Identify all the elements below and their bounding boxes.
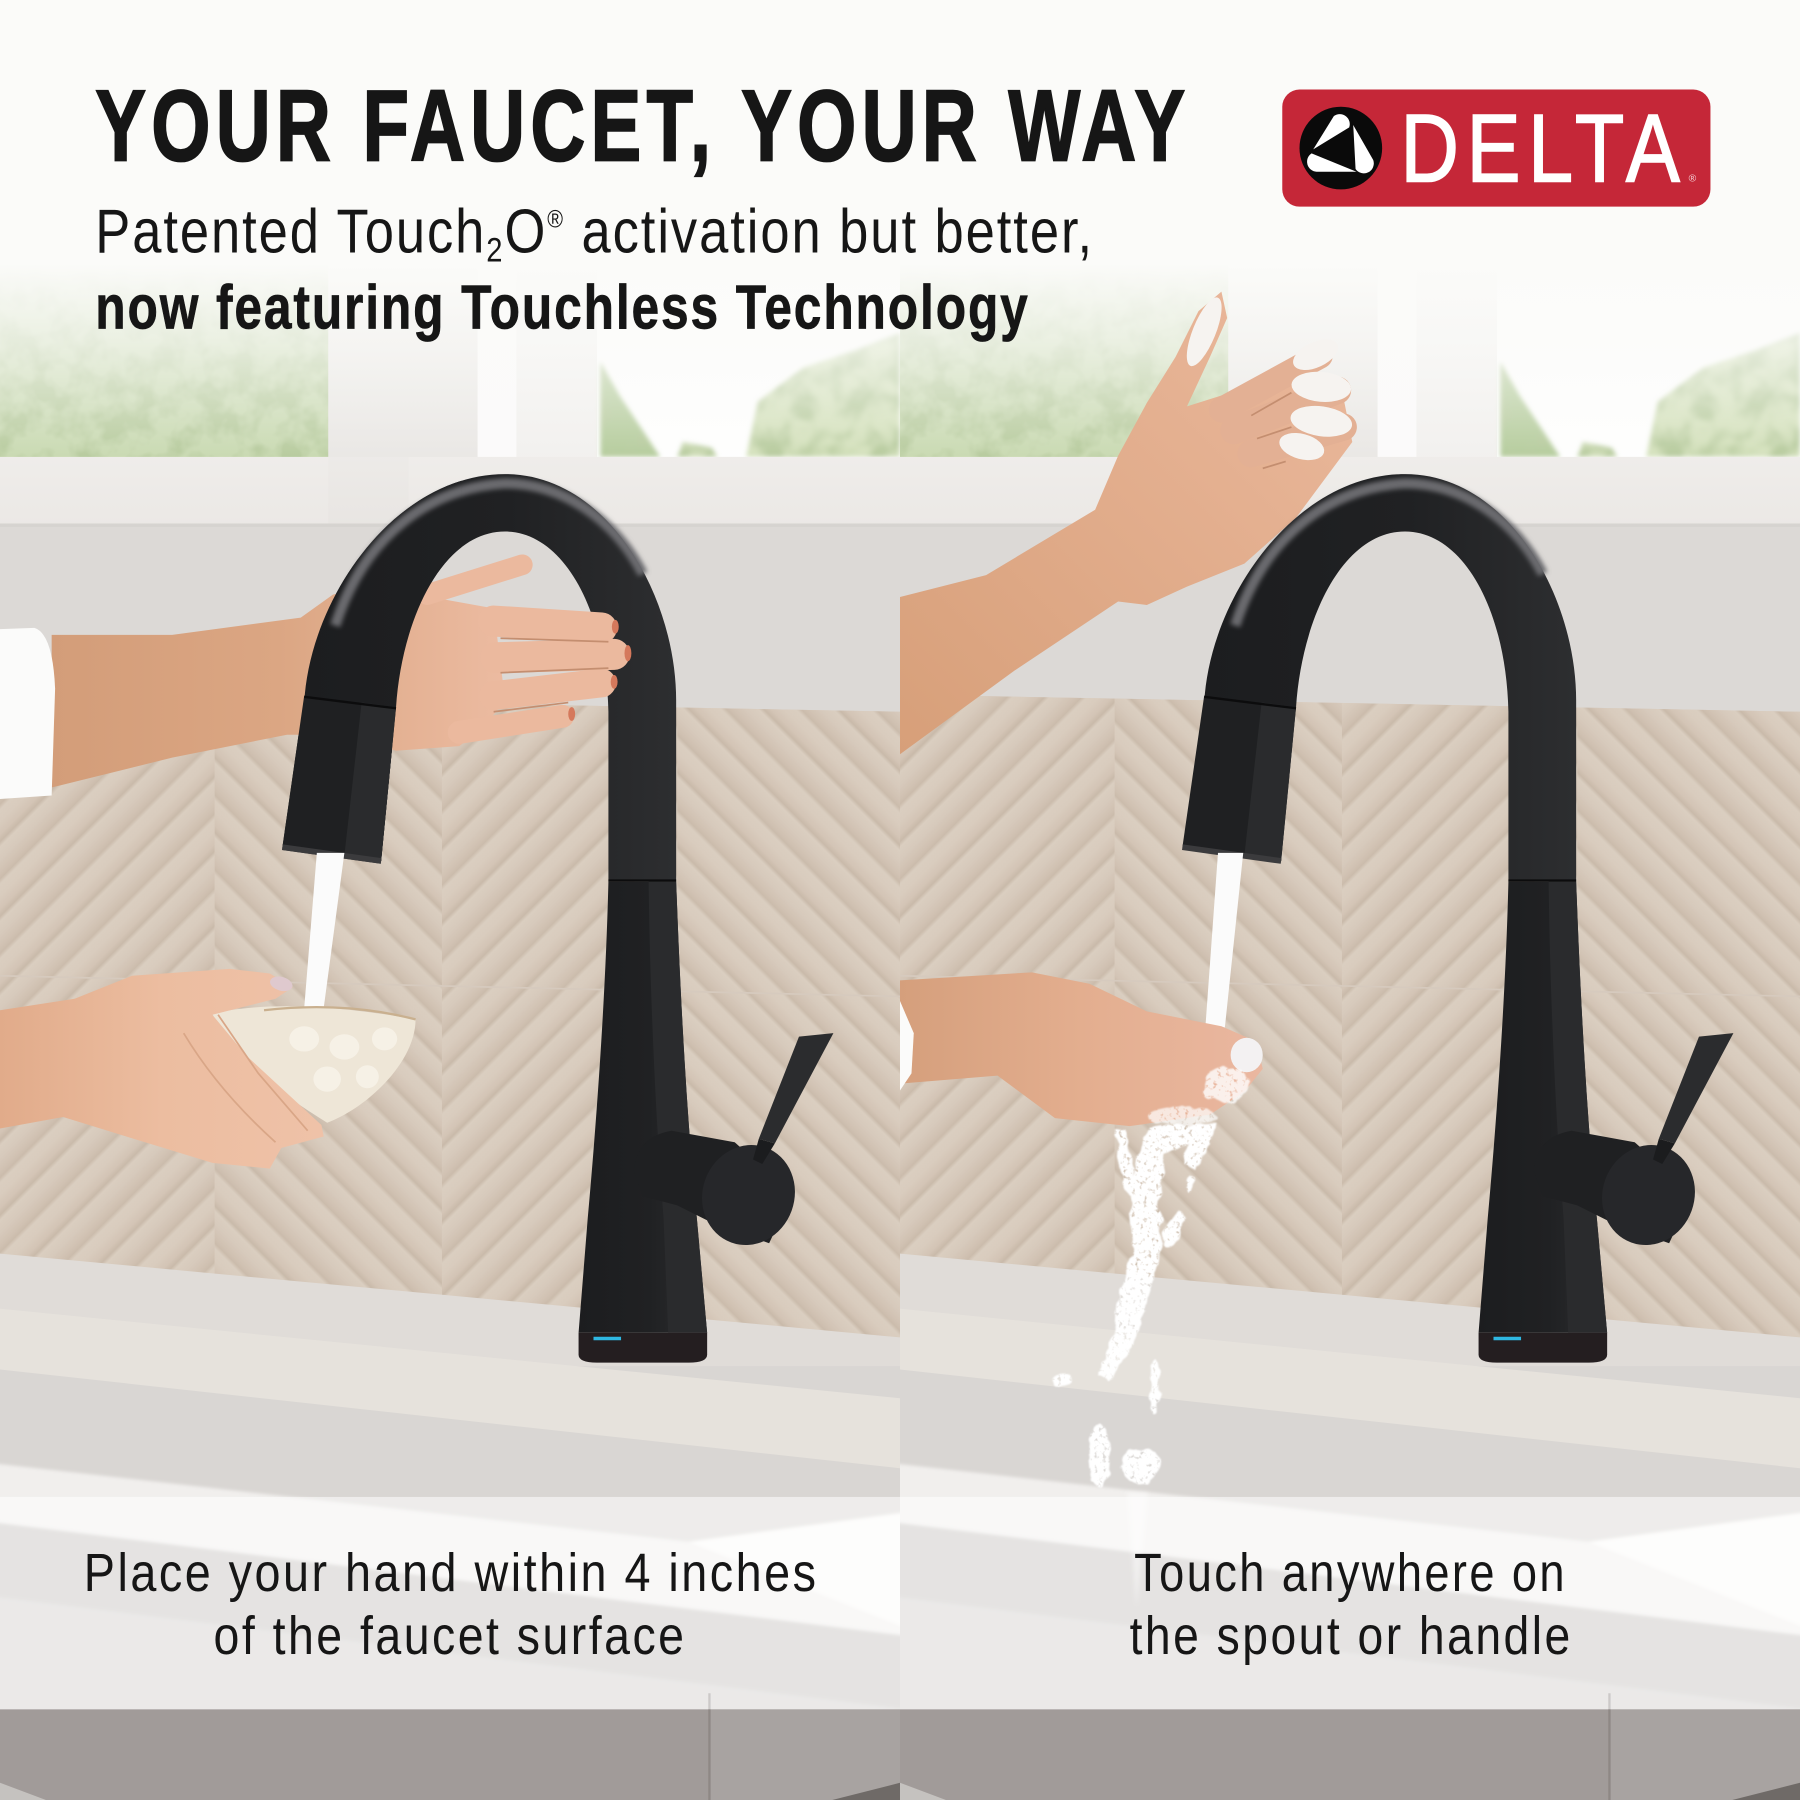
faucet: right: [1182, 474, 1733, 1363]
water stream: left: [304, 853, 344, 1008]
title: YOUR FAUCET, YOUR WAY: [95, 71, 1190, 183]
caption: left panel: of the faucet surface: [214, 1606, 686, 1666]
water stream: right: [1205, 853, 1243, 1027]
left hand holding bowl: [0, 969, 324, 1169]
faucet: left: [282, 474, 833, 1363]
subtitle line 1: Patented Touch: [95, 198, 557, 267]
faint falling water: [1127, 1492, 1148, 1607]
Delta logo: ®: [1689, 173, 1697, 184]
caption: left panel: Place your hand within 4 inches: [84, 1543, 818, 1603]
subtitle line 2: now featuring Touchless Technology: [95, 273, 1030, 342]
Delta logo: DELTA: [1401, 95, 1687, 202]
caption: right panel: [1130, 1543, 1573, 1666]
subtitle line 1: activation but better,: [565, 198, 1094, 267]
right hand touching spout: [900, 292, 1354, 754]
subtitle line 1: ®: [547, 205, 565, 233]
left hand hovering near spout: [52, 565, 631, 788]
left sleeve: [0, 628, 55, 799]
kitchen background: right panel: [866, 0, 1800, 1800]
right lower sleeve: [900, 1001, 914, 1091]
caption: right panel: the spout or handle: [1130, 1606, 1573, 1666]
Delta logo: [1282, 90, 1710, 207]
caption: right panel: Touch anywhere on: [1134, 1543, 1567, 1603]
water splash: [1054, 1066, 1249, 1488]
white bowl: [212, 1006, 416, 1123]
fingertip foam: [1231, 1038, 1263, 1072]
right lower hand: [900, 972, 1263, 1126]
subtitle line 1: 2: [486, 232, 504, 270]
caption: left panel: [84, 1543, 818, 1666]
top white fade: [0, 0, 1800, 528]
subtitle line 1: O: [504, 198, 547, 267]
kitchen background: left panel: [0, 0, 934, 1800]
spout front over the hand: [282, 480, 462, 864]
